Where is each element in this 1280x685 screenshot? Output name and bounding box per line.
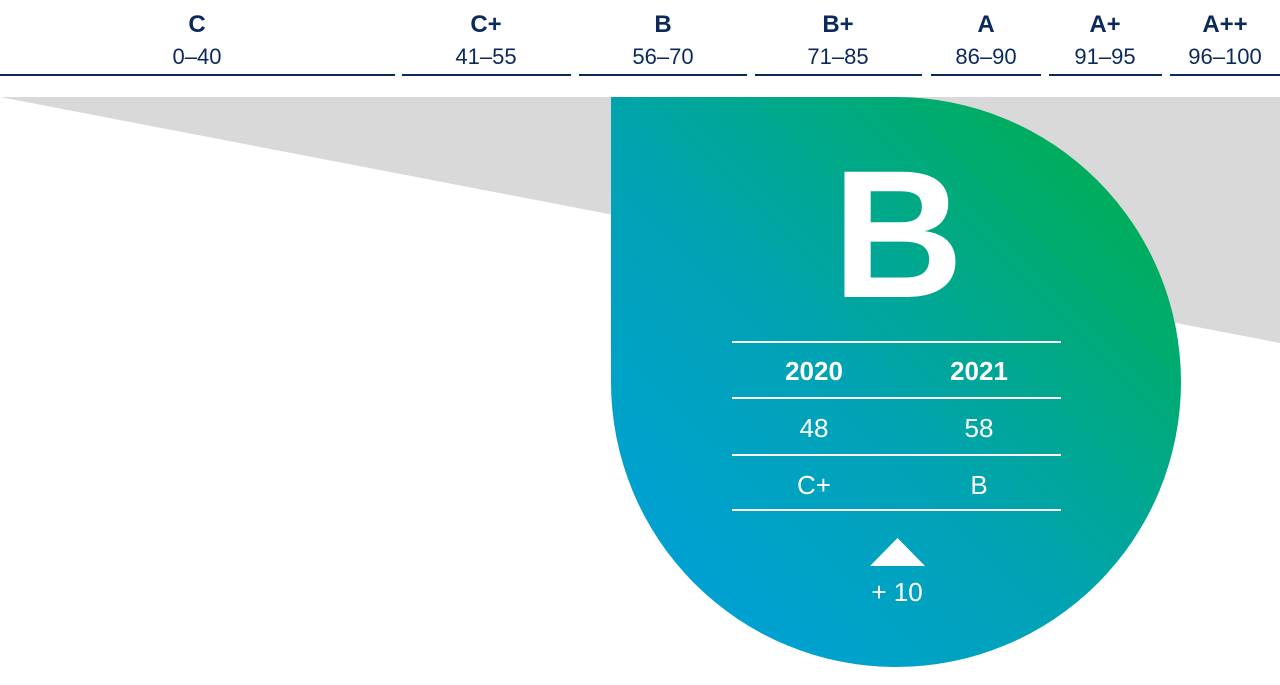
grade B: 56–70 xyxy=(632,44,694,69)
grade A++: A++ xyxy=(1202,11,1248,38)
score table: C+ xyxy=(797,470,831,500)
gray wedge pointer xyxy=(0,97,1280,343)
grade C: C xyxy=(188,11,206,38)
grade C+: C+ xyxy=(470,11,502,38)
grade A+: A+ xyxy=(1089,11,1121,38)
big grade letter: B xyxy=(832,132,964,336)
score table: 2020 xyxy=(785,356,843,386)
score table: 2021 xyxy=(950,356,1008,386)
icon: up triangle xyxy=(870,538,925,566)
grade B: B xyxy=(654,11,672,38)
score drop badge xyxy=(611,97,1181,667)
score table: 48 xyxy=(800,413,828,443)
grade A: A xyxy=(977,11,995,38)
grade C xyxy=(0,11,395,76)
grade C: 0–40 xyxy=(173,44,221,69)
grade B xyxy=(579,11,747,76)
score table: B xyxy=(970,470,988,500)
change value: + 10 xyxy=(871,577,923,607)
grade A+ xyxy=(1049,11,1162,76)
grade C+: 41–55 xyxy=(455,44,517,69)
grade A++: 96–100 xyxy=(1188,44,1262,69)
score table: 58 xyxy=(965,413,993,443)
grade A+: 91–95 xyxy=(1074,44,1136,69)
grade scale header xyxy=(0,11,1280,76)
grade B+ xyxy=(755,11,922,76)
grade B+: B+ xyxy=(822,11,854,38)
grade C+ xyxy=(402,11,571,76)
grade B+: 71–85 xyxy=(807,44,869,69)
score table xyxy=(732,341,1061,511)
grade A++ xyxy=(1170,11,1280,76)
grade A: 86–90 xyxy=(955,44,1017,69)
grade A xyxy=(931,11,1041,76)
